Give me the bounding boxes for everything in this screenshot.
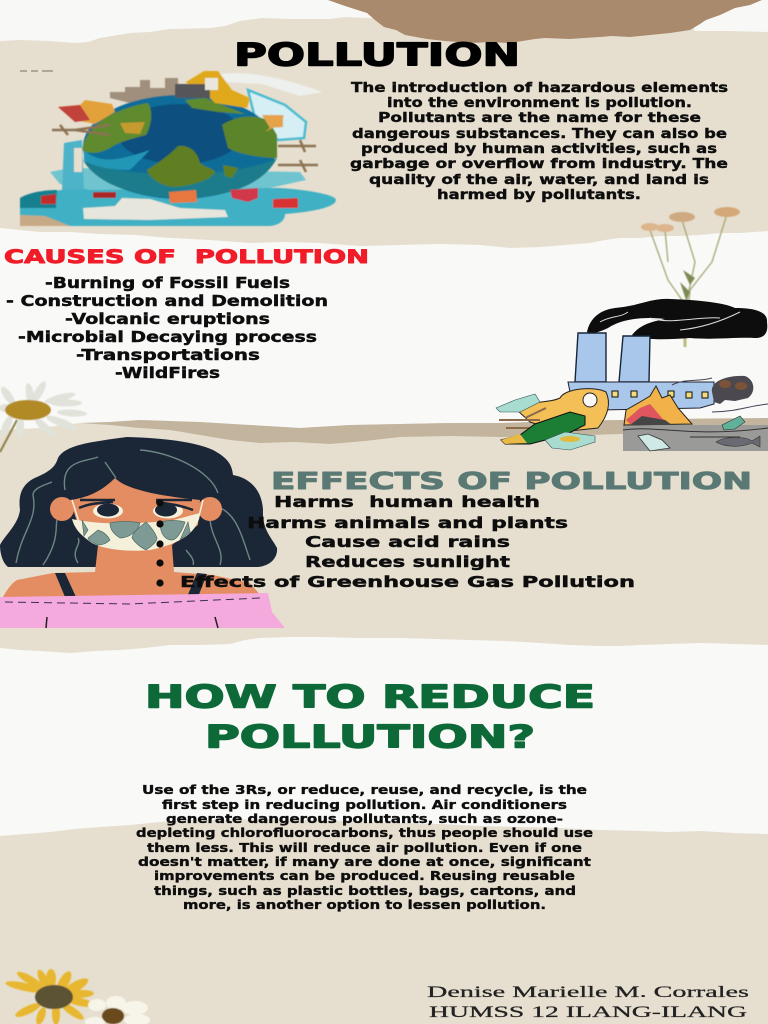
reduce heading: HOW TO REDUCE bbox=[145, 680, 595, 716]
reduce paragraph: improvements can be produced. Reusing reusable bbox=[154, 869, 575, 883]
excavator and cloud bbox=[220, 73, 322, 96]
icon: factory bbox=[496, 299, 768, 451]
causes list: -Burning of Fossil Fuels bbox=[45, 274, 290, 292]
neck and shoulders bbox=[3, 545, 262, 597]
reduce heading bbox=[145, 680, 595, 756]
globe bbox=[83, 95, 277, 199]
continents bbox=[82, 103, 151, 153]
intro text block bbox=[350, 81, 728, 203]
face bbox=[70, 478, 200, 552]
factory base bbox=[568, 382, 714, 410]
torn paper: top brown strip bbox=[328, 0, 762, 43]
icon: polluted earth bbox=[20, 71, 336, 226]
causes list: -Microbial Decaying process bbox=[18, 328, 317, 346]
intro text block: The introduction of hazardous elements bbox=[351, 81, 728, 96]
effects list: Effects of Greenhouse Gas Pollution bbox=[180, 573, 635, 591]
icon: daisy bbox=[0, 380, 87, 452]
wrapper bbox=[545, 432, 595, 450]
icon: yellow flower bbox=[5, 968, 95, 1024]
intro text block: quality of the air, water, and land is bbox=[369, 173, 709, 188]
plastic bag bbox=[638, 434, 670, 451]
small dashes bbox=[20, 70, 53, 72]
intro text block: into the environment is pollution. bbox=[387, 96, 692, 111]
brown sticks bbox=[499, 408, 546, 428]
trash bbox=[41, 194, 56, 204]
causes heading: CAUSES OF POLLUTION bbox=[4, 246, 369, 268]
intro text block: Pollutants are the name for these bbox=[378, 111, 701, 126]
author credit: Denise Marielle M. Corrales bbox=[427, 984, 749, 1001]
reduce paragraph: Use of the 3Rs, or reduce, reuse, and recycle, is the bbox=[142, 783, 587, 797]
effects list: Reduces sunlight bbox=[305, 553, 510, 571]
effects list: Harms human health bbox=[274, 493, 540, 511]
reduce paragraph: things, such as plastic bottles, bags, cartons, and bbox=[154, 884, 576, 898]
torn paper: lower white band bbox=[0, 637, 768, 836]
causes list: -WildFires bbox=[115, 364, 220, 382]
reduce heading: POLLUTION? bbox=[205, 720, 535, 756]
intro text block: garbage or overflow from industry. The bbox=[350, 157, 728, 172]
smoke bbox=[587, 299, 767, 339]
causes list bbox=[6, 274, 328, 382]
causes list: -Volcanic eruptions bbox=[65, 310, 270, 328]
causes list: -Transportations bbox=[76, 346, 260, 364]
effects list bbox=[156, 493, 635, 591]
straps bbox=[55, 573, 207, 597]
reduce paragraph: generate dangerous pollutants, such as ozone- bbox=[166, 812, 563, 826]
intro text block: dangerous substances. They can also be bbox=[352, 127, 727, 142]
intro text block: produced by human activities, such as bbox=[361, 142, 717, 157]
skull bbox=[712, 376, 753, 404]
icon: dried flowers bbox=[641, 207, 740, 347]
reduce paragraph: first step in reducing pollution. Air conditioners bbox=[162, 798, 567, 812]
fire and dead trees bbox=[58, 100, 115, 124]
mask bbox=[72, 513, 200, 551]
torn paper: top white strip bbox=[0, 0, 768, 43]
green bottle bbox=[501, 412, 585, 444]
chimneys bbox=[575, 333, 606, 382]
ears bbox=[50, 497, 74, 521]
ice bbox=[248, 90, 306, 140]
ruined buildings bbox=[110, 78, 178, 103]
torn paper: middle white band bbox=[0, 228, 768, 430]
globe water pond bbox=[20, 188, 336, 226]
hair bbox=[0, 437, 277, 567]
grey polluted ground bbox=[623, 425, 768, 451]
causes list: - Construction and Demolition bbox=[6, 292, 328, 310]
reduce paragraph: them less. This will reduce air pollution. Even if one bbox=[147, 841, 582, 855]
reduce paragraph bbox=[136, 783, 593, 912]
flame bbox=[624, 386, 692, 425]
reduce paragraph: depleting chlorofluorocarbons, thus people should use bbox=[136, 826, 593, 840]
intro text block: harmed by pollutants. bbox=[437, 188, 641, 203]
reduce paragraph: more, is another option to lessen pollution. bbox=[183, 898, 546, 912]
pink top bbox=[0, 593, 285, 628]
author credit bbox=[427, 984, 749, 1021]
author credit: HUMSS 12 ILANG-ILANG bbox=[429, 1004, 748, 1021]
title: POLLUTION bbox=[234, 38, 520, 74]
effects list: Cause acid rains bbox=[305, 533, 510, 551]
bottle bbox=[722, 416, 745, 430]
jug bbox=[517, 389, 608, 432]
torn paper: brown strip bbox=[80, 418, 768, 444]
teal wrapper bbox=[496, 394, 540, 412]
eyes and brows bbox=[93, 504, 123, 518]
effects list: Harms animals and plants bbox=[247, 514, 568, 532]
waterfall bbox=[62, 140, 84, 190]
reduce paragraph: doesn't matter, if many are done at once, significant bbox=[138, 855, 591, 869]
fish bbox=[716, 436, 760, 447]
effects heading: EFFECTS OF POLLUTION bbox=[271, 467, 752, 495]
icon: white flower bbox=[85, 996, 150, 1024]
illustration: woman with mask bbox=[0, 437, 285, 628]
